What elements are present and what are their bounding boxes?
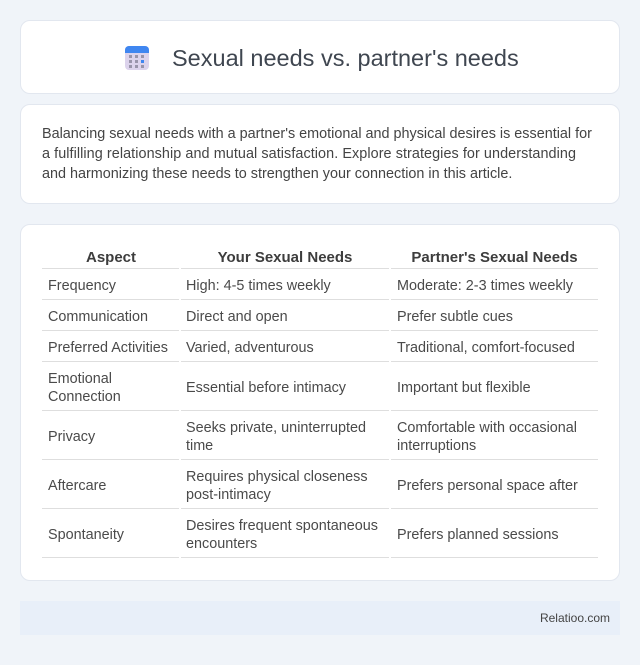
intro text: Balancing sexual needs with a partner's emotional and physical desires is essential for <box>42 126 592 142</box>
row: Frequency <box>48 278 573 294</box>
row: Emotional Connection <box>48 371 531 405</box>
column headers: Partner's Sexual Needs <box>411 249 578 266</box>
row: Emotional Connection: Important but flexible <box>397 380 531 396</box>
row: Emotional Connection: Essential before intimacy <box>186 380 346 396</box>
footer brand: Relatioo.com <box>540 611 610 625</box>
row: Spontaneity <box>48 518 559 552</box>
table card <box>20 224 620 581</box>
intro text <box>42 126 592 182</box>
row: Privacy: Seeks private, uninterrupted <box>186 420 366 436</box>
row: Privacy: time <box>186 438 213 454</box>
row: Preferred Activities: Preferred Activities <box>48 340 168 356</box>
row: Emotional Connection: Connection <box>48 389 121 405</box>
column headers <box>86 249 578 266</box>
title: Sexual needs vs. partner's needs <box>172 45 519 71</box>
row: Communication <box>48 309 513 325</box>
column headers: Your Sexual Needs <box>218 249 352 266</box>
row: Aftercare: Prefers personal space after <box>397 478 578 494</box>
icon: calendar <box>125 46 149 70</box>
row: Spontaneity: encounters <box>186 536 257 552</box>
row: Frequency: Frequency <box>48 278 116 294</box>
row: Aftercare: Aftercare <box>48 478 106 494</box>
intro text: a fulfilling relationship and mutual satisfaction. Explore strategies for understanding <box>42 146 576 162</box>
row: Privacy: Comfortable with occasional <box>397 420 577 436</box>
footer bar <box>20 601 620 635</box>
row: Privacy: Privacy <box>48 429 95 445</box>
row: Preferred Activities: Traditional, comfort-focused <box>397 340 575 356</box>
row: Privacy: interruptions <box>397 438 476 454</box>
row: Aftercare <box>48 469 578 503</box>
row: Frequency: High: 4-5 times weekly <box>186 278 331 294</box>
intro text: and harmonizing these needs to strengthen your connection in this article. <box>42 166 512 182</box>
row: Communication: Direct and open <box>186 309 288 325</box>
row: Spontaneity: Desires frequent spontaneous <box>186 518 378 534</box>
column headers: Aspect <box>86 249 136 266</box>
row: Aftercare: Requires physical closeness <box>186 469 368 485</box>
row: Preferred Activities <box>48 340 575 356</box>
row: Privacy <box>48 420 577 454</box>
row: Preferred Activities: Varied, adventurous <box>186 340 314 356</box>
row: Emotional Connection: Emotional <box>48 371 112 387</box>
row: Spontaneity: Prefers planned sessions <box>397 527 559 543</box>
row: Aftercare: post-intimacy <box>186 487 271 503</box>
row: Communication: Communication <box>48 309 148 325</box>
intro card <box>20 104 620 204</box>
header card <box>20 20 620 94</box>
row: Communication: Prefer subtle cues <box>397 309 513 325</box>
row: Frequency: Moderate: 2-3 times weekly <box>397 278 573 294</box>
row: Spontaneity: Spontaneity <box>48 527 124 543</box>
